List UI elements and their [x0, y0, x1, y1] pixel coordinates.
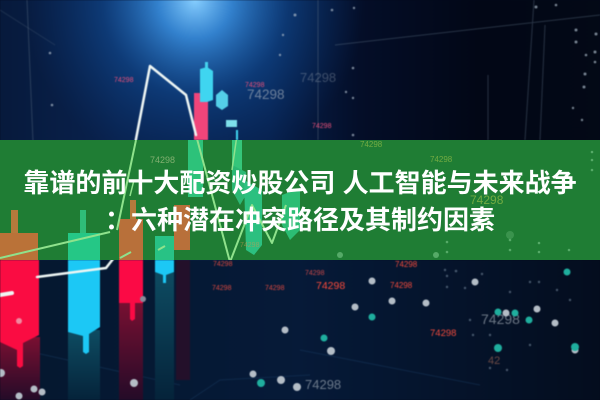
bokeh circles — [0, 278, 578, 400]
tinted candlesticks inside band — [0, 137, 300, 260]
red price labels: 74298 — [212, 285, 232, 292]
title: ：六种潜在冲突路径及其制约因素 — [105, 205, 495, 235]
lower right data dots — [444, 269, 571, 371]
red price labels: 74298 — [316, 280, 345, 292]
grey price labels: 74298 — [305, 377, 341, 392]
faint labels in band: 74298 — [470, 193, 504, 207]
grey price labels — [247, 70, 520, 392]
grey price labels: 74298 — [247, 87, 285, 102]
red price labels: 74298 — [395, 260, 418, 269]
title: 靠谱的前十大配资炒股公司 人工智能与未来战争 — [23, 168, 577, 198]
lower candlesticks — [0, 260, 190, 400]
red price labels: 74298 — [430, 328, 456, 339]
upper candlesticks — [194, 62, 238, 140]
teal circles — [257, 268, 579, 387]
faint dot columns in band — [337, 151, 593, 258]
faint labels in band: 74298 — [430, 155, 453, 164]
grey price labels: 74298 — [300, 70, 336, 85]
faint labels in band: 74298 — [360, 140, 383, 149]
grey price labels: 74298 — [481, 311, 520, 327]
red price labels: 74298 — [114, 77, 134, 84]
red price labels: 74298 — [390, 281, 413, 290]
red price labels: 74298 — [213, 261, 233, 268]
green title band — [0, 140, 600, 260]
red price labels: 74298 — [305, 270, 325, 277]
faint labels in band — [150, 140, 504, 249]
faint labels in band: 74298 — [240, 242, 260, 249]
title — [23, 168, 577, 235]
grey price labels: 42 — [488, 355, 500, 367]
faint labels in band: 74298 — [150, 155, 175, 165]
data dots, top right — [49, 4, 597, 136]
green price line in band — [0, 135, 286, 262]
red price labels — [114, 77, 456, 339]
red price labels: 74298 — [245, 82, 265, 89]
red price labels: 74298 — [265, 285, 285, 292]
red price labels: 74298 — [312, 123, 332, 130]
white price line — [0, 66, 196, 295]
